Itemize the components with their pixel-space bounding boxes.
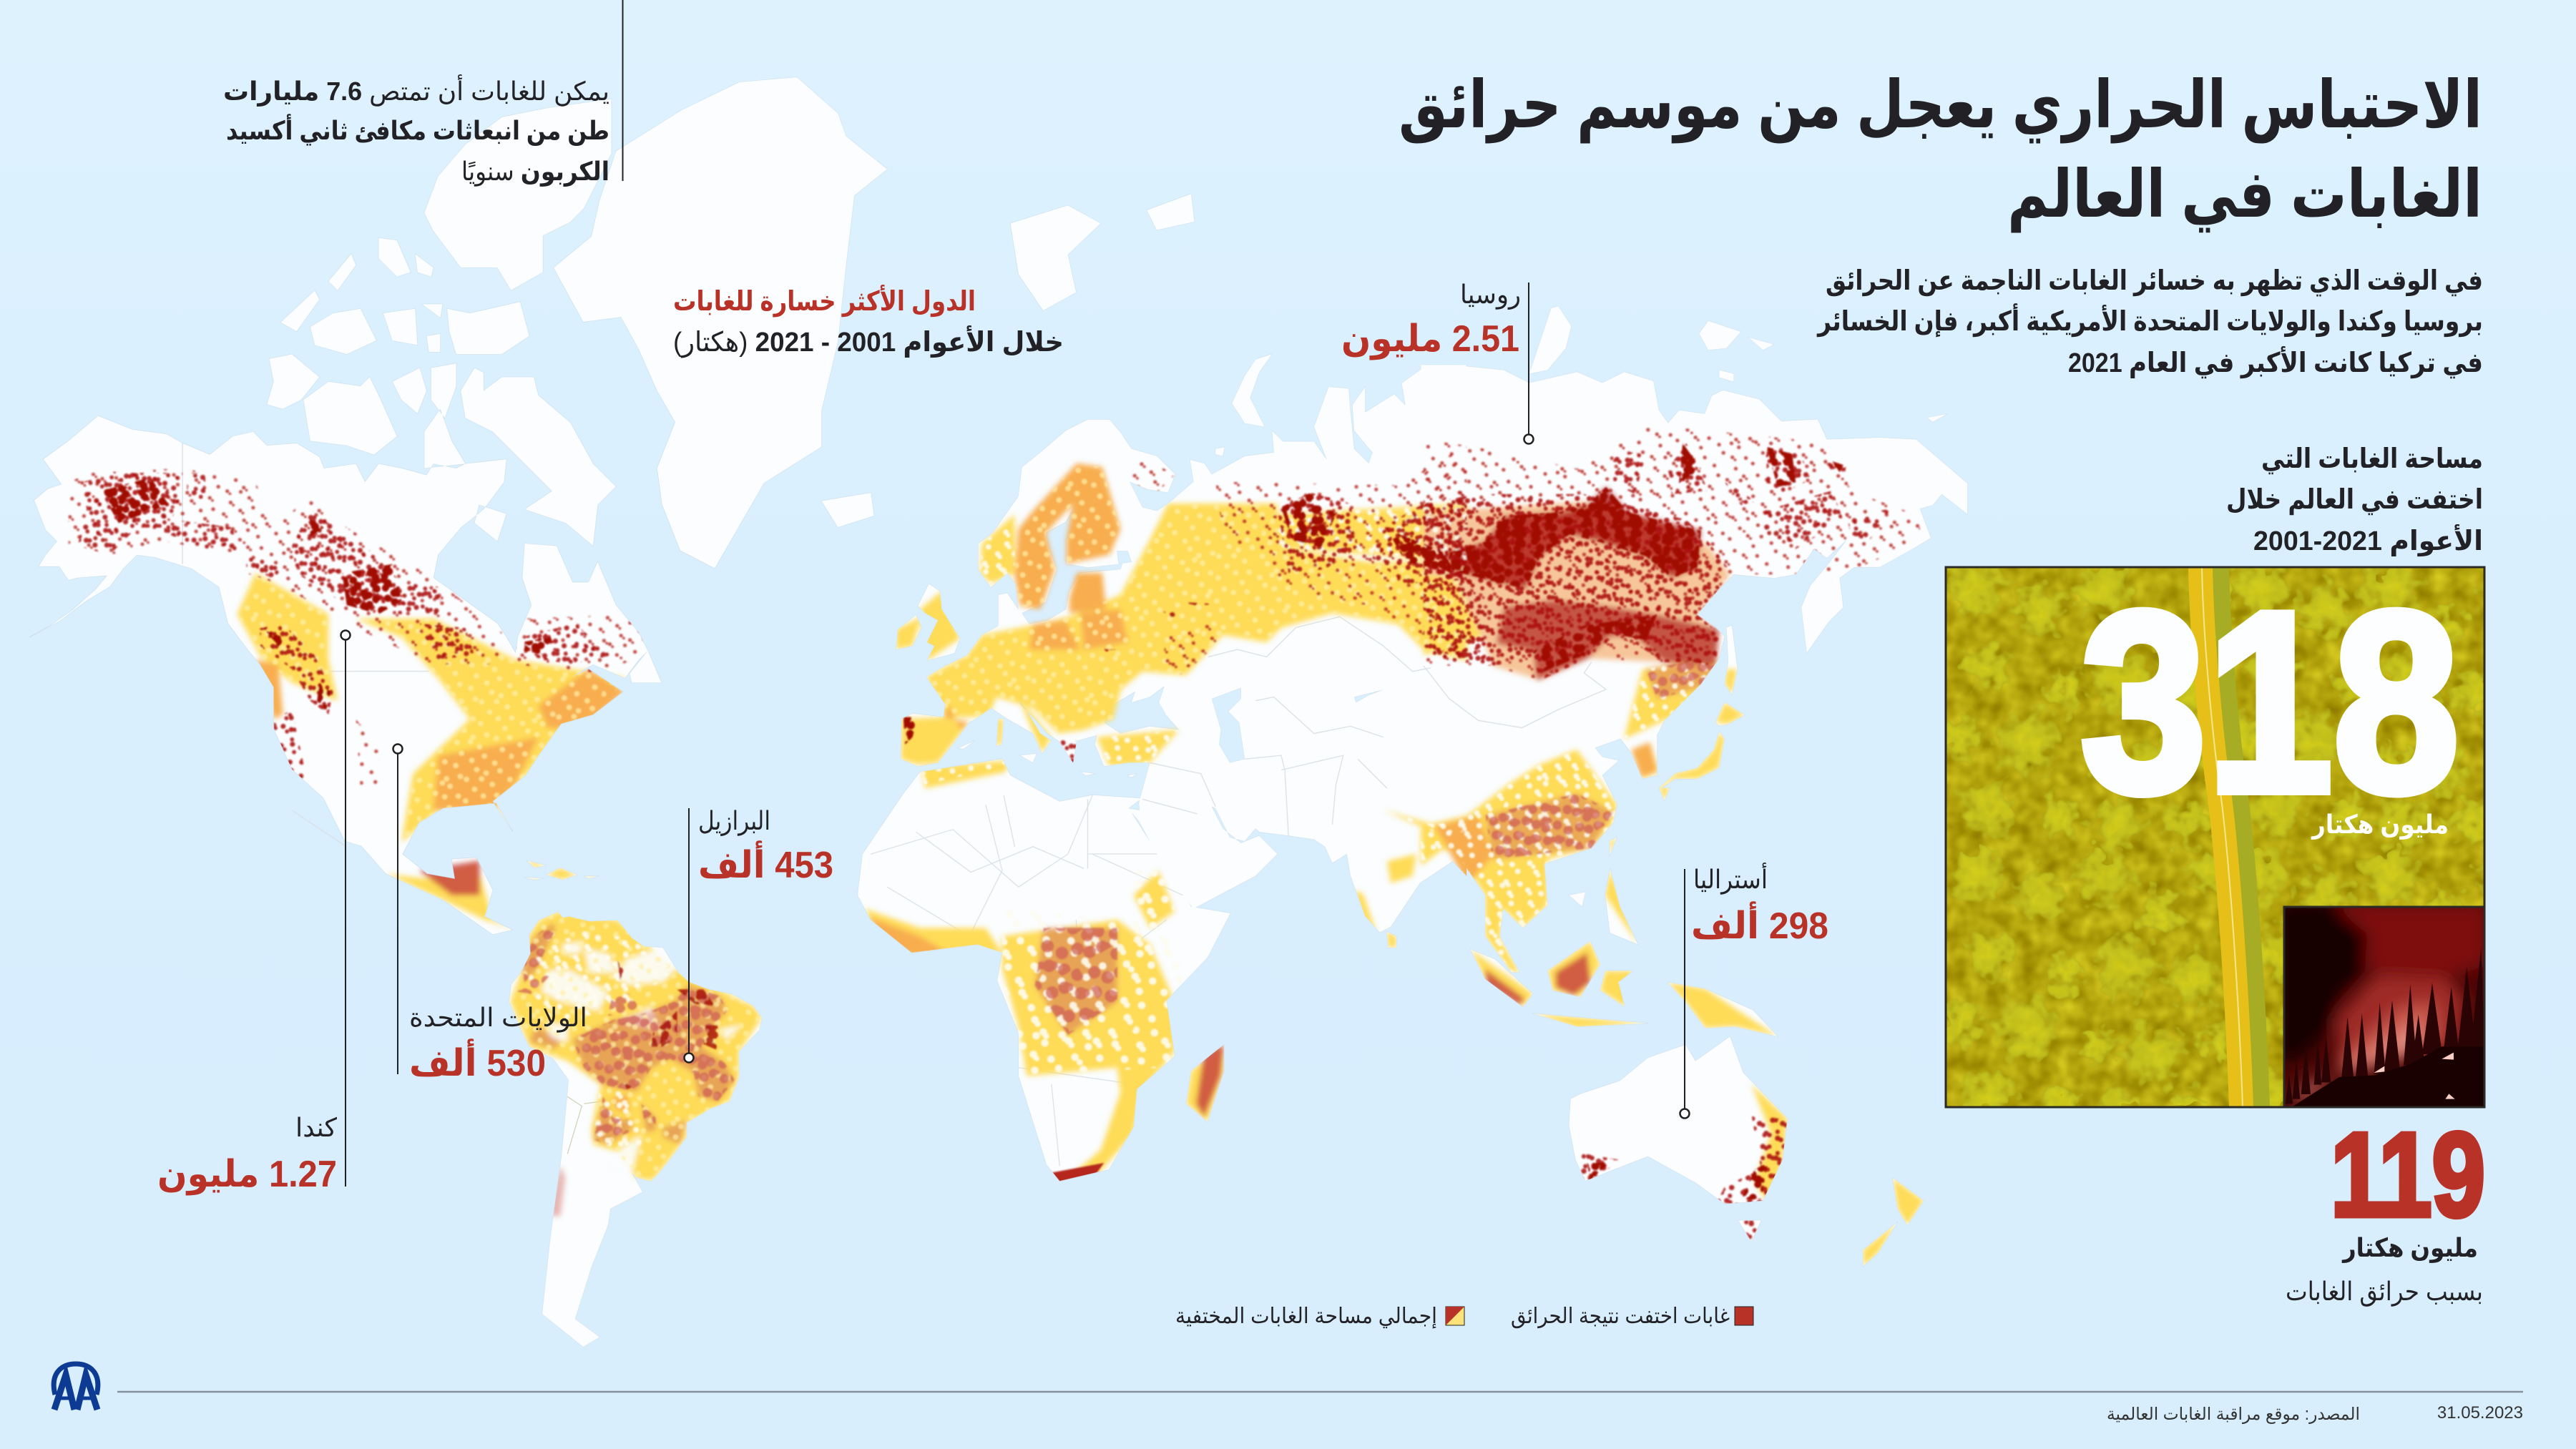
world map	[29, 77, 1967, 1347]
intro paragraph: في الوقت الذي تظهر به خسائر الغابات الناجمة عن الحرائق	[1826, 266, 2483, 296]
fire loss: southern Africa	[1052, 1163, 1104, 1184]
country borders	[182, 443, 1606, 1166]
legend	[1175, 1305, 1753, 1329]
callout: Russia: 2.51 مليون	[1341, 318, 1519, 360]
callout: Brazil: 453 ألف	[698, 840, 833, 886]
intro paragraph: في تركيا كانت الأكبر في العام 2021	[2068, 345, 2483, 379]
AA logo	[54, 1364, 98, 1410]
legend label: total loss: إجمالي مساحة الغابات المختفية	[1175, 1305, 1437, 1329]
callout: Australia: أستراليا	[1693, 863, 1768, 895]
intro paragraph	[1816, 266, 2483, 379]
callout: Russia	[1341, 280, 1534, 443]
main title	[1399, 69, 2482, 233]
ridge	[2291, 1046, 2484, 1107]
white gaps in the patchy forest belts	[524, 504, 1719, 1174]
figure 318: 318	[2080, 559, 2459, 846]
smoke and glow	[2277, 901, 2487, 1101]
fire loss: sparse specks	[69, 425, 1920, 787]
tree silhouettes	[2286, 948, 2484, 1104]
subheading: area lost: مساحة الغابات التي	[2261, 444, 2483, 474]
callout: United States	[393, 744, 587, 1084]
carbon note with rule	[223, 0, 622, 187]
mottled pink burnt forest	[517, 662, 1715, 1144]
date: 31.05.2023	[2437, 1403, 2523, 1423]
smooth colour fields: yellow, orange, pink, peach	[237, 463, 1924, 1267]
callout: Russia: روسيا	[1460, 280, 1521, 310]
legend label: fire loss: غابات اختفت نتيجة الحرائق	[1511, 1305, 1730, 1328]
legend swatch: fire loss	[1735, 1307, 1753, 1325]
callout: Australia: 298 ألف	[1691, 901, 1828, 947]
legend swatch: total loss	[1446, 1307, 1464, 1325]
unit: million hectares: مليون هكتار	[2311, 810, 2449, 840]
figure 119: 119	[2331, 1109, 2485, 1242]
unit: million hectares due to fires: مليون هكتار	[2341, 1233, 2478, 1263]
fire loss: medium specks	[77, 443, 1891, 1242]
map heading	[673, 284, 1064, 358]
callout: Canada: 1.27 مليون	[157, 1154, 337, 1196]
subheading: area lost	[2226, 444, 2483, 557]
pale mottling in the solid forest belts	[237, 463, 1466, 1182]
intro paragraph: بروسيا وكندا والولايات المتحدة الأمريكية أكبر، فإن الخسائر	[1816, 303, 2483, 338]
map heading: الدول الأكثر خسارة للغابات	[673, 284, 976, 318]
callout: Brazil	[684, 806, 833, 1063]
carbon note with rule: طن من انبعاثات مكافئ ثاني أكسيد	[226, 114, 609, 146]
callout: Brazil: البرازيل	[698, 806, 770, 836]
forest texture	[1946, 567, 2484, 1107]
unit: million hectares due to fires: بسبب حرائق الغابات	[2286, 1277, 2483, 1307]
carbon note with rule: يمكن للغابات أن تمتص 7.6 مليارات	[223, 74, 609, 107]
callout: United States: الولايات المتحدة	[409, 1003, 587, 1033]
forest loss heat layers	[69, 425, 1924, 1267]
panel frames	[1946, 567, 2484, 1107]
callout: Australia	[1680, 863, 1828, 1119]
fire loss: dense core	[100, 443, 1843, 1199]
source: المصدر: موقع مراقبة الغابات العالمية	[2107, 1405, 2360, 1424]
land masses	[29, 77, 1967, 1347]
subheading: area lost: الأعوام 2021-2001	[2253, 524, 2483, 557]
callout: United States: 530 ألف	[409, 1038, 546, 1084]
footer rule	[117, 1391, 2523, 1392]
callout: Canada: كندا	[295, 1113, 338, 1142]
subheading: area lost: اختفت في العالم خلال	[2226, 485, 2483, 516]
fire photo inset	[2285, 908, 2484, 1106]
main title: الغابات في العالم	[2007, 158, 2482, 233]
map heading: خلال الأعوام 2001 - 2021 (هكتار)	[673, 325, 1064, 358]
road	[2200, 567, 2261, 1107]
flames	[2374, 1053, 2455, 1099]
unit: million hectares due to fires	[2286, 1233, 2483, 1307]
forest photo panel	[1946, 559, 2487, 1107]
callout: Canada	[157, 631, 351, 1196]
carbon note with rule: الكربون سنويًا	[461, 157, 609, 187]
speckle textures: mottling and fire loss	[69, 425, 1920, 1242]
